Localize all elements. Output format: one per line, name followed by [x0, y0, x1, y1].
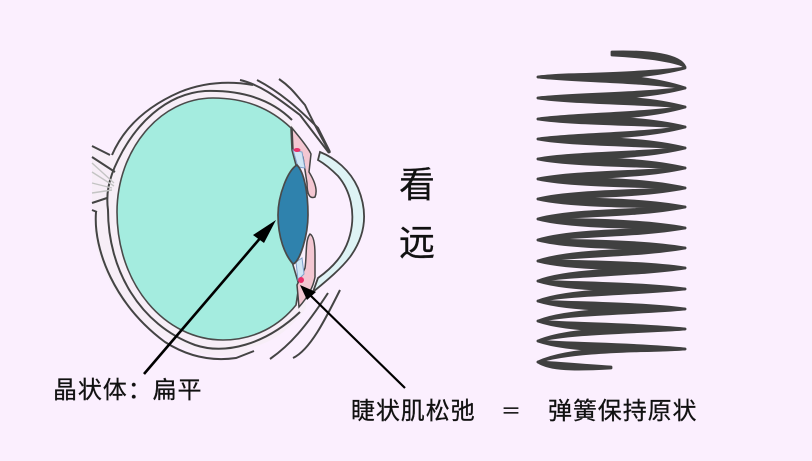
arrow to ciliary muscle: [300, 285, 405, 388]
vitreous body: [117, 98, 299, 340]
title: 看远: 远: [399, 222, 435, 263]
ciliary muscle upper spot: [294, 148, 300, 152]
label: spring keeps its shape: 弹簧保持原状: [548, 398, 697, 425]
lower zonule fibres: [296, 258, 304, 280]
cornea: [313, 152, 364, 292]
sclera and choroid band: [92, 83, 306, 356]
eye wall lines: [92, 79, 340, 359]
title: 看远: [399, 164, 435, 263]
upper zonule fibres: [293, 150, 305, 168]
ciliary muscle lower spot: [298, 277, 304, 283]
optic nerve fibres: [92, 163, 114, 193]
upper iris: [292, 128, 316, 197]
label: lens flat: 晶状体：扁平: [53, 377, 202, 404]
arrow to lens: [144, 220, 276, 374]
eye cross-section diagram: [92, 79, 364, 359]
label: ciliary muscle relaxed: 睫状肌松弛: [351, 398, 476, 425]
spring illustration: [538, 52, 685, 369]
equals sign: ＝: [501, 401, 521, 423]
title: 看远: 看: [399, 164, 435, 205]
lens: [278, 165, 308, 264]
lower iris: [297, 234, 315, 307]
